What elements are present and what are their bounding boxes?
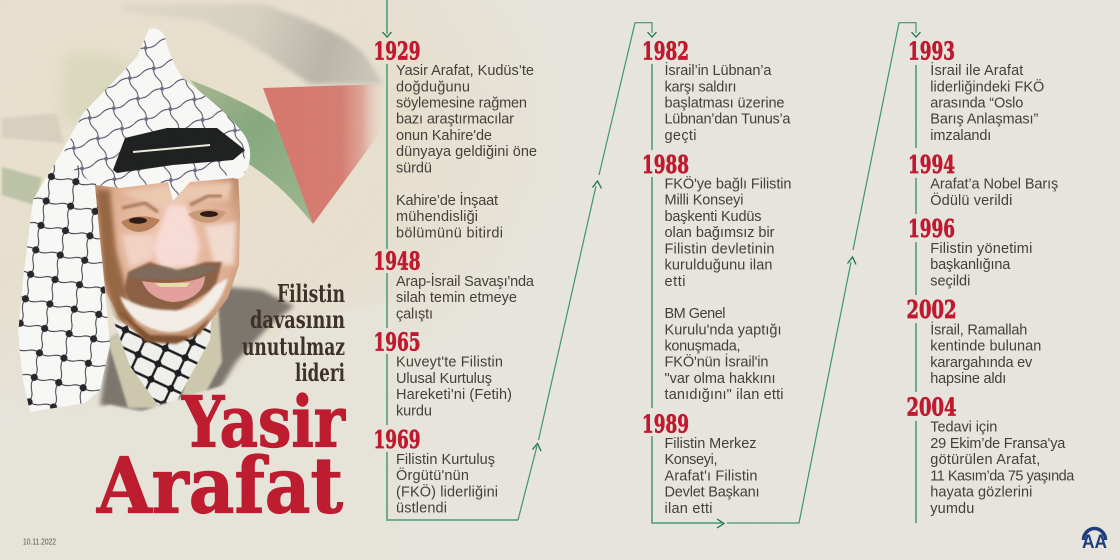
1969 (374, 425, 498, 517)
subtitle: lideri (295, 358, 345, 387)
1929: onun Kahire'de (396, 128, 492, 144)
face: mustache (128, 265, 218, 279)
1948: çalıştı (396, 306, 433, 322)
1994 (908, 150, 1058, 209)
face: right eyebrow (190, 196, 222, 205)
face: teeth (154, 283, 190, 287)
2004: Tedavi için (930, 420, 997, 436)
1929: bazı araştırmacılar (396, 112, 514, 128)
1969: (FKÖ) liderliğini (396, 482, 498, 500)
face: white beard (120, 278, 228, 332)
face: nose (153, 205, 200, 268)
1989: Filistin Merkez (664, 436, 756, 452)
1988: Kurulu'nda yaptığı (664, 322, 782, 338)
2004: hayata gözlerini (930, 485, 1032, 501)
keffiyeh: black band (113, 128, 245, 173)
1929 (374, 36, 537, 242)
1948: 1948 (374, 246, 420, 276)
1988: etti (664, 274, 686, 290)
coat (100, 286, 294, 412)
1965: kurdu (396, 404, 432, 420)
flag: pale green fade (60, 50, 240, 155)
face: left cheek (122, 235, 155, 268)
1982: 1982 (642, 36, 689, 66)
flag: green band (190, 80, 313, 224)
1989: ilan etti (664, 501, 712, 517)
1988: başkenti Kudüs (664, 209, 762, 225)
torn paper foreground (0, 300, 400, 558)
flag: left band green (2, 167, 42, 205)
1929: Yasir Arafat, Kudüs’te (396, 63, 534, 79)
1982: geçti (664, 128, 696, 144)
1982: başlatması üzerine (664, 96, 784, 112)
face: left shadow (96, 190, 135, 325)
subtitle (242, 279, 345, 387)
1969: üstlendi (396, 501, 447, 517)
collar (108, 300, 222, 408)
1929: söylemesine rağmen (396, 96, 527, 112)
face: left eyebrow (122, 203, 158, 212)
1989: Konseyi, (664, 452, 718, 468)
keffiyeh: band stitching (133, 145, 210, 152)
1929: bölümünü bitirdi (396, 226, 503, 242)
face: mouth (142, 276, 205, 302)
2002: kentinde bulunan (930, 339, 1041, 355)
1929: 1929 (374, 36, 420, 66)
timeline connector (382, 0, 920, 528)
2004: 11 Kasım’da 75 yaşında (930, 468, 1075, 484)
face: right eye (188, 209, 226, 223)
1929: Kahire’de İnşaat (396, 191, 498, 209)
1989: 1989 (642, 410, 689, 438)
column 2 (642, 36, 792, 517)
1993: 1993 (908, 36, 955, 66)
1965 (374, 328, 512, 420)
1929: mühendisliği (396, 209, 478, 225)
subtitle: davasının (250, 305, 345, 334)
1996: seçildi (930, 274, 970, 290)
subtitle: unutulmaz (242, 332, 345, 361)
portrait of Yasser Arafat (18, 28, 294, 412)
1948 (374, 246, 535, 322)
face: left eye (121, 216, 160, 232)
1994: Ödülü verildi (930, 191, 1012, 209)
title name: Arafat (96, 442, 343, 532)
face: forehead light (120, 182, 232, 212)
1965: Hareketi'ni (Fetih) (396, 387, 512, 403)
1989: Arafat'ı Filistin (664, 468, 758, 484)
face: right light (205, 222, 236, 265)
2002 (906, 295, 1041, 387)
1989 (642, 410, 760, 517)
2004: 2004 (906, 392, 956, 422)
1969: Örgütü'nün (396, 466, 469, 484)
1982: İsrail’in Lübnan’a (664, 61, 772, 79)
2004 (906, 392, 1075, 517)
1965: Ulusal Kurtuluş (396, 371, 492, 387)
1988: Filistin devletinin (664, 241, 774, 257)
1969: Filistin Kurtuluş (396, 452, 495, 468)
1982: Lübnan’dan Tunus’a (664, 112, 791, 128)
flag: black band (123, 4, 384, 84)
flag: red triangle (263, 84, 385, 224)
flag: left band grey (2, 113, 64, 143)
1988: Milli Konseyi (664, 193, 744, 209)
2002: 2002 (906, 295, 956, 324)
keffiyeh: top pattern (60, 28, 246, 201)
beige stain on the left (0, 0, 580, 450)
1929: doğduğunu (396, 79, 470, 95)
1993: imzalandı (930, 128, 991, 144)
1929: sürdü (396, 160, 432, 176)
1965: Kuveyt'te Filistin (396, 354, 503, 370)
1994: Arafat’a Nobel Barış (930, 177, 1058, 193)
1948: Arap-İsrail Savaşı'nda (396, 272, 535, 290)
face: chin shadow (118, 310, 210, 344)
1982 (642, 36, 791, 144)
1948: silah temin etmeye (396, 290, 517, 306)
1996 (908, 214, 1032, 290)
1965: 1965 (374, 328, 420, 356)
1993: İsrail ile Arafat (930, 61, 1023, 79)
icon: AA logo: AA (1082, 532, 1107, 553)
2004: götürülen Arafat, (930, 452, 1040, 468)
title name (96, 380, 346, 532)
1988: BM Genel (664, 306, 726, 322)
face (94, 172, 240, 344)
1993: liderliğindeki FKÖ (930, 77, 1044, 95)
neck scarf (112, 310, 212, 405)
flag of Palestine background (2, 4, 385, 224)
1989: Devlet Başkanı (664, 485, 760, 501)
1996: Filistin yönetimi (930, 241, 1032, 257)
title name: Yasir (181, 380, 346, 464)
1993 (908, 36, 1044, 144)
column 1 (374, 36, 537, 517)
1969: 1969 (374, 425, 420, 454)
1988: kurulduğunu ilan (664, 258, 772, 274)
2002: hapsine aldı (930, 371, 1006, 387)
1988 (642, 150, 792, 403)
1993: Barış Anlaşması” (930, 112, 1038, 128)
keffiyeh head wrap (18, 28, 250, 412)
1988: "var olma hakkını (664, 371, 776, 387)
1994: 1994 (908, 150, 955, 179)
1988: tanıdığını" ilan etti (664, 387, 784, 403)
2002: İsrail, Ramallah (930, 320, 1027, 338)
1988: 1988 (642, 150, 689, 179)
1988: olan bağımsız bir (664, 225, 775, 241)
1988: FKÖ'nün İsrail'in (664, 353, 768, 371)
1996: başkanlığına (930, 257, 1011, 273)
face: stubble (124, 262, 222, 316)
subtitle: Filistin (277, 279, 345, 308)
2004: 29 Ekim’de Fransa'ya (930, 436, 1066, 452)
1929: dünyaya geldiğini öne (396, 144, 537, 160)
1996: 1996 (908, 214, 955, 243)
1988: FKÖ'ye bağlı Filistin (664, 174, 792, 192)
1993: arasında “Oslo (930, 96, 1023, 112)
2002: karargahında ev (930, 355, 1033, 371)
date: 10.11.2022 (23, 538, 56, 546)
column 3 (906, 36, 1075, 517)
2004: yumdu (930, 501, 974, 517)
1988: konuşmada, (664, 338, 740, 354)
keffiyeh: drape pattern (18, 160, 110, 412)
1982: karşı saldırı (664, 79, 736, 95)
